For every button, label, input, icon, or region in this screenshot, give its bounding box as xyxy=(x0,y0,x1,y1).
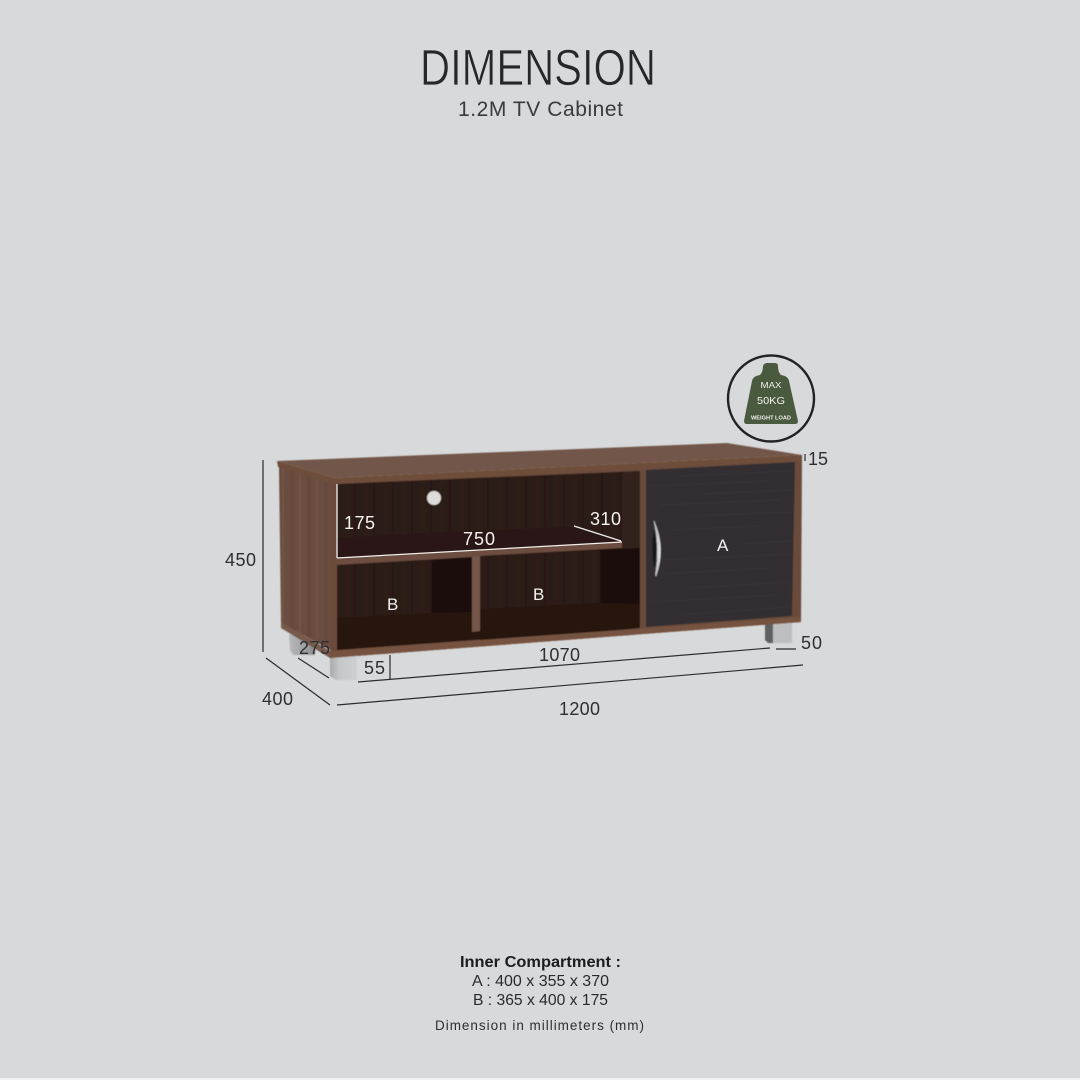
front frame xyxy=(330,458,802,658)
lower left compartment xyxy=(337,557,472,650)
height 175 line xyxy=(336,484,338,558)
side panel xyxy=(279,467,336,653)
label 175: 175 xyxy=(344,513,375,533)
label 400: 400 xyxy=(262,689,293,709)
label 275: 275 xyxy=(299,638,330,658)
dark dimension lines xyxy=(263,454,805,705)
units note: Dimension in millimeters (mm) xyxy=(435,1018,644,1033)
cable hole xyxy=(427,491,441,505)
bottom edge strip xyxy=(0,1078,1080,1080)
label 1070: 1070 xyxy=(539,645,580,665)
compartment floor xyxy=(337,603,640,650)
label compartment B right: B xyxy=(533,585,544,604)
label 750: 750 xyxy=(463,529,495,549)
badge label: max: MAX xyxy=(760,380,782,390)
front left leg xyxy=(330,655,357,680)
dark dimension labels xyxy=(225,449,828,719)
width 750 line xyxy=(337,542,622,558)
label 450: 450 xyxy=(225,550,256,570)
white dimension lines xyxy=(337,484,622,558)
door xyxy=(646,462,795,627)
label 310: 310 xyxy=(590,509,621,529)
shelf front edge xyxy=(336,542,622,565)
depth 275 line xyxy=(298,658,329,678)
tv cabinet xyxy=(277,443,802,680)
top surface xyxy=(277,443,802,478)
bottom plinth xyxy=(330,617,801,658)
centre divider xyxy=(472,556,480,632)
door handle xyxy=(652,521,661,576)
icon: weight xyxy=(744,363,798,424)
upper shelf surface xyxy=(337,527,622,558)
label 15: 15 xyxy=(808,449,828,469)
label 55: 55 xyxy=(364,658,385,678)
back left leg xyxy=(289,634,316,655)
right compartment inner wall xyxy=(622,471,640,630)
leg height 50 line xyxy=(776,648,796,650)
right partition xyxy=(622,541,640,548)
weight load badge xyxy=(728,356,814,442)
leg offset 55 line xyxy=(389,655,391,679)
width 1200 line xyxy=(337,665,803,705)
lower right compartment xyxy=(480,548,622,640)
width 1070 line xyxy=(358,648,770,682)
depth 400 line xyxy=(266,658,330,705)
right leg xyxy=(765,621,792,643)
upper compartment xyxy=(337,471,640,558)
badge label: weight load: WEIGHT LOAD xyxy=(751,416,791,422)
depth 310 line xyxy=(574,526,621,541)
compartment A size: A : 400 x 355 x 370 xyxy=(472,973,609,990)
white dimension labels xyxy=(344,509,729,614)
subtitle: 1.2M TV Cabinet xyxy=(458,98,623,121)
label 1200: 1200 xyxy=(559,699,600,719)
top front edge xyxy=(277,455,802,484)
inner compartment notes xyxy=(435,954,644,1033)
badge label: 50kg: 50KG xyxy=(757,395,785,407)
title: DIMENSION xyxy=(420,39,656,96)
notes heading: Inner Compartment : xyxy=(460,954,621,971)
label compartment A: A xyxy=(717,536,729,555)
compartment B size: B : 365 x 400 x 175 xyxy=(473,992,608,1009)
height 450 line xyxy=(262,460,264,652)
label compartment B left: B xyxy=(387,595,398,614)
label 50: 50 xyxy=(801,633,822,653)
door grain xyxy=(650,471,792,615)
top thickness 15 line xyxy=(804,454,806,461)
